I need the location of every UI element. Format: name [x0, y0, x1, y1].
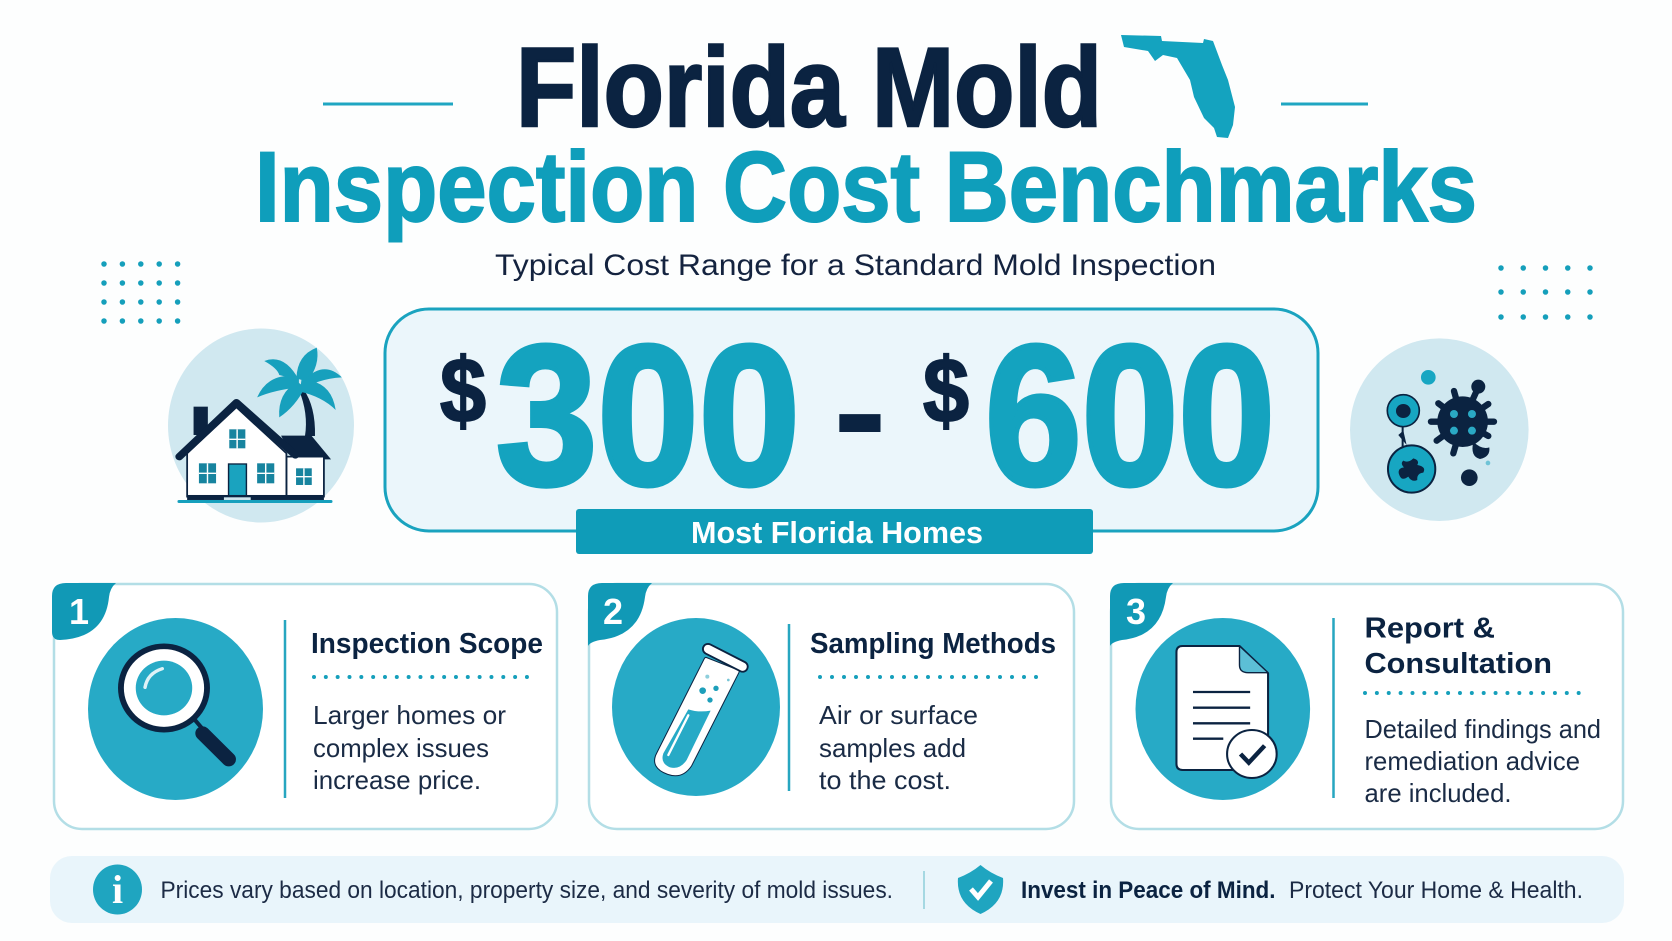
text: card 3 body — [1364, 714, 1601, 808]
text: card 2 body: to the cost. — [819, 765, 951, 795]
panel: card 3 Report & Consultation — [1110, 583, 1623, 829]
icon: mold spores — [1350, 338, 1529, 521]
price: $600: 600 — [985, 305, 1275, 527]
badge 3: 3 — [1126, 591, 1146, 632]
text: invest in peace of mind: Protect Your Home & Health. — [1289, 877, 1583, 904]
heading: Inspection Scope: Inspection Scope — [311, 628, 543, 660]
ribbon: Most Florida Homes — [576, 509, 1093, 554]
badge 1: 1 — [69, 591, 89, 632]
heading: Report & Consultation — [1364, 612, 1552, 680]
badge 1 — [52, 583, 116, 640]
icon: info — [93, 864, 142, 914]
icon: Florida map — [1121, 35, 1235, 138]
title: Florida Mold: Florida Mold — [516, 25, 1102, 150]
text: card 2 body: Air or surface — [819, 700, 978, 730]
text: card 1 body: Larger homes or — [313, 700, 506, 730]
badge 3 — [1110, 583, 1173, 646]
text: price note: Prices vary based on location, property size, and severity of mold issues. — [160, 877, 893, 904]
text: card 3 body: remediation advice — [1364, 746, 1580, 776]
price: $300: $ — [440, 340, 486, 442]
badge 2: 2 — [603, 591, 623, 632]
heading: Sampling Methods: Sampling Methods — [810, 628, 1056, 660]
ribbon: Most Florida Homes: Most Florida Homes — [691, 515, 983, 550]
title: Inspection Cost Benchmarks: Inspection Cost Benchmarks — [255, 131, 1477, 242]
text: invest in peace of mind: Invest in Peace of Mind. — [1021, 877, 1276, 904]
icon: test tube — [612, 618, 780, 796]
icon: report document — [1136, 618, 1310, 800]
text: card 1 body — [313, 700, 506, 795]
icon: shield check — [958, 865, 1003, 914]
heading: Report & Consultation: Report & — [1364, 612, 1495, 644]
text: card 2 body: samples add — [819, 733, 966, 763]
panel: card 2 Sampling Methods — [588, 583, 1074, 829]
text: card 1 body: increase price. — [313, 765, 481, 795]
price: $300: 300 — [496, 305, 800, 527]
panel: card 1 Inspection Scope — [52, 583, 557, 829]
price dash: - — [833, 326, 887, 494]
text: card 3 body: Detailed findings and — [1364, 714, 1601, 744]
text: invest in peace of mind — [1021, 877, 1583, 904]
badge 2 — [588, 583, 652, 646]
icon: info: i — [112, 867, 123, 912]
icon: magnifying glass — [88, 618, 263, 800]
heading: Report & Consultation: Consultation — [1364, 648, 1552, 680]
panel: footer note — [50, 856, 1624, 923]
text: card 3 body: are included. — [1364, 778, 1512, 808]
panel: price range — [385, 305, 1318, 554]
text: card 2 body — [819, 700, 978, 795]
subtitle: Typical Cost Range for a Standard Mold Inspection — [495, 249, 1216, 282]
text: card 1 body: complex issues — [313, 733, 489, 763]
icon: house with palm tree — [168, 328, 354, 522]
price: $600: $ — [923, 340, 969, 442]
